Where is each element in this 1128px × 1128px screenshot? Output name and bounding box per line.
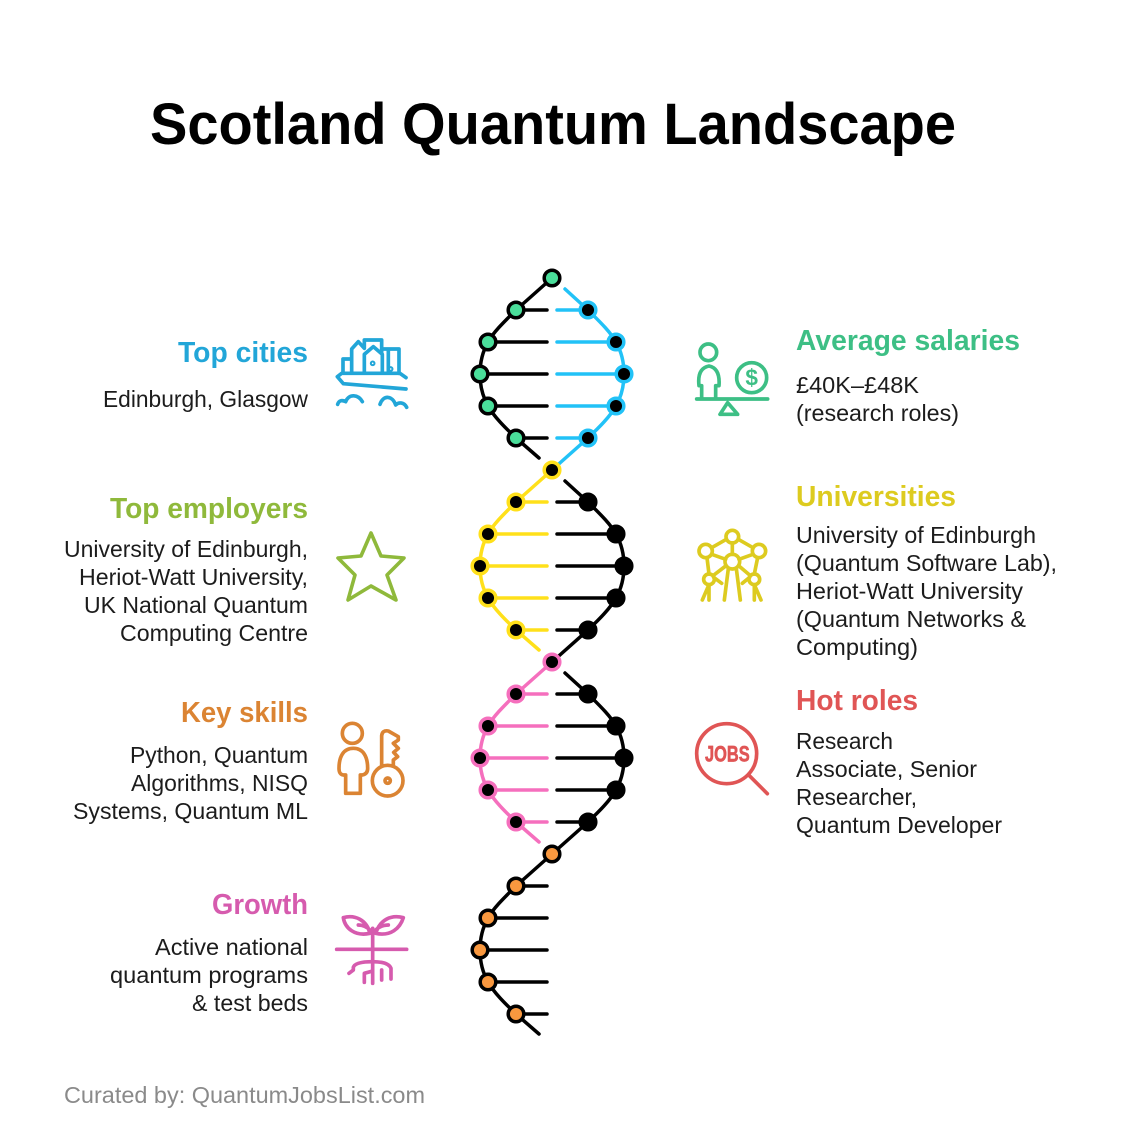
heading: key skills: Key skills [181,697,308,729]
heading: growth: Growth [212,889,308,921]
text: universities list: University of Edinburgh [796,522,1036,548]
panel: top cities [103,337,407,412]
helix segment 3: pink and black [472,654,632,854]
helix segment 1: green and blue [472,270,632,470]
text: employers list: UK National Quantum [84,592,308,618]
text: growth description: & test beds [192,990,308,1016]
icon: atomium [699,530,766,600]
text: employers list: Computing Centre [120,620,308,646]
heading: hot roles: Hot roles [796,685,918,717]
icon: jobs magnifier: JOBS [705,742,750,767]
icon: plant with roots [337,917,407,983]
footer credit: Curated by: QuantumJobsList.com [64,1082,425,1108]
title: Scotland Quantum Landscape [150,92,956,157]
text: skills list: Algorithms, NISQ [131,770,308,796]
text: salary range: (research roles) [796,400,959,426]
panel: growth [110,889,407,1016]
text: roles list: Researcher, [796,784,917,810]
text: roles list: Research [796,728,893,754]
text: skills list: Python, Quantum [130,742,308,768]
panel: average salaries [697,325,1020,426]
heading: top employers: Top employers [110,493,308,525]
text: salary range: £40K–£48K [796,372,920,398]
text: roles list [796,728,1002,838]
text: universities list [796,522,1057,660]
text: roles list: Quantum Developer [796,812,1002,838]
panel: universities [699,481,1057,660]
text: growth description [110,934,308,1016]
icon: person with key [339,723,403,796]
text: universities list: (Quantum Networks & [796,606,1026,632]
panel: top employers [64,493,404,646]
heading: universities: Universities [796,481,956,513]
text: skills list [73,742,308,824]
icon: jobs magnifier [697,724,767,794]
panel: key skills [73,697,403,824]
icon: person balancing coin: $ [745,365,758,391]
icon: person balancing coin [697,344,768,414]
helix segment 4: orange and black [472,846,560,1034]
text: universities list: (Quantum Software Lab), [796,550,1057,576]
text: salary range [796,372,959,426]
text: employers list: Heriot-Watt University, [79,564,308,590]
panel: hot roles [697,685,1002,838]
text: growth description: quantum programs [110,962,308,988]
icon: star [338,533,404,600]
text: skills list: Systems, Quantum ML [73,798,308,824]
text: growth description: Active national [155,934,308,960]
icon: city [337,340,407,407]
text: roles list: Associate, Senior [796,756,977,782]
text: employers list [64,536,308,646]
text: universities list: Computing) [796,634,918,660]
DNA helix [472,270,632,1034]
text: cities list: Edinburgh, Glasgow [103,386,308,412]
text: universities list: Heriot-Watt University [796,578,1024,604]
text: employers list: University of Edinburgh, [64,536,308,562]
heading: average salaries: Average salaries [796,325,1020,357]
helix segment 2: yellow and black [472,462,632,662]
heading: top cities: Top cities [178,337,308,369]
